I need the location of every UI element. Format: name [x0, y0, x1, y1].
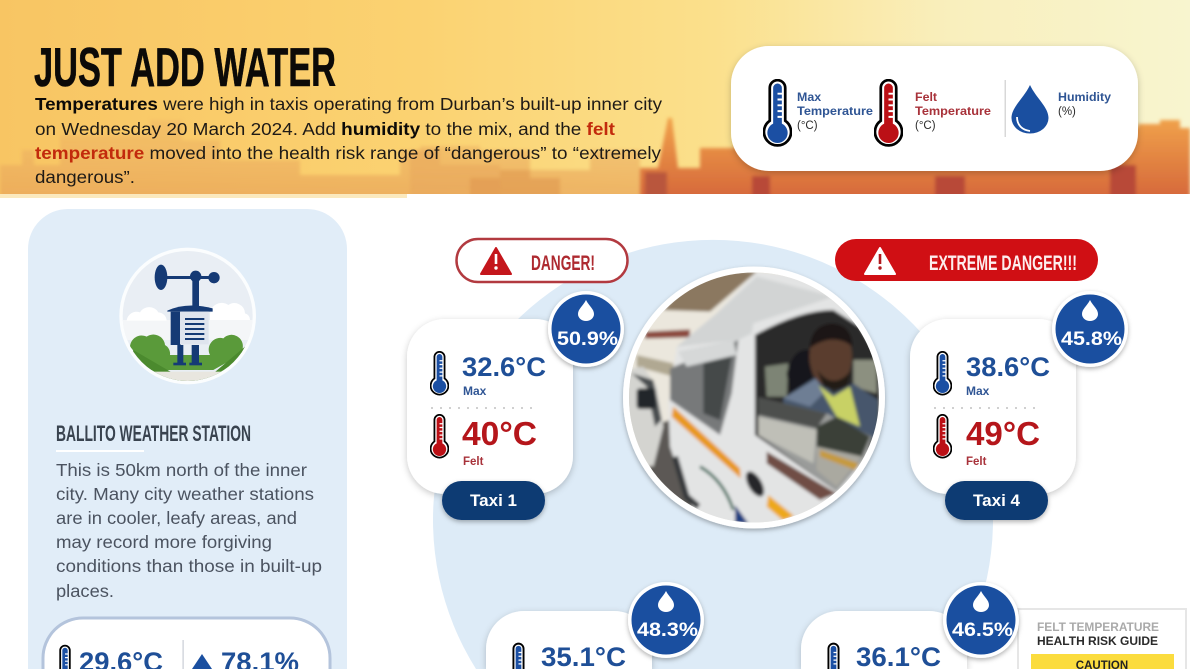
background circle [433, 240, 993, 669]
station description: may record more forgiving [56, 532, 272, 552]
legend panel [731, 46, 1138, 171]
legend: max temperature: Max [797, 90, 821, 104]
legend: felt temperature: Felt [915, 90, 937, 104]
legend: max temperature: Temperature [797, 104, 873, 118]
humidity badge: 48.3% [628, 582, 704, 658]
card: taxi 1: Felt [463, 456, 484, 468]
humidity badge: 50.9%: 50.9% [557, 328, 618, 350]
extreme danger label: EXTREME DANGER!!! [929, 252, 1077, 275]
card: lower left taxi [486, 582, 704, 669]
legend: max temperature [797, 90, 873, 132]
station readings box [43, 618, 330, 669]
danger label: DANGER! [531, 252, 595, 275]
humidity badge: 45.8%: 45.8% [1061, 328, 1122, 350]
header banner with skyline [0, 0, 1190, 200]
card: taxi 1: Max [463, 384, 487, 398]
icon: warning triangle [481, 248, 511, 274]
legend: max temperature: (°C) [797, 120, 818, 132]
intro text: on Wednesday 20 March 2024. Add humidity to the mix, and the felt [35, 119, 615, 139]
danger label [456, 239, 628, 282]
station description: conditions than those in built-up [56, 556, 322, 576]
station description: This is 50km north of the inner [56, 460, 307, 480]
station description: places. [56, 581, 114, 601]
icon: humidity drop [1012, 85, 1048, 134]
intro text: Temperatures were high in taxis operating from Durban’s built-up inner city [35, 94, 662, 114]
legend: humidity: (%) [1058, 106, 1076, 118]
icon: max temperature thermometer [764, 80, 791, 145]
extreme danger label [835, 239, 1098, 281]
card: taxi 1: 40°C [462, 415, 537, 452]
legend: felt temperature: Temperature [915, 104, 991, 118]
card: taxi 4: 38.6°C [966, 352, 1050, 382]
card: taxi 4: Felt [966, 456, 987, 468]
legend: humidity: Humidity [1058, 90, 1111, 104]
card: taxi 1: 32.6°C [462, 352, 546, 382]
legend: felt temperature: (°C) [915, 120, 936, 132]
intro text [35, 94, 662, 187]
card: taxi 4: 49°C [966, 415, 1040, 452]
humidity badge: 48.3%: 48.3% [637, 619, 698, 641]
card: taxi 4 [910, 291, 1128, 520]
intro text: dangerous”. [35, 167, 135, 187]
humidity badge: 46.5% [943, 582, 1019, 658]
humidity badge: 45.8% [1052, 291, 1128, 367]
card: taxi 4: Taxi 4 [973, 491, 1021, 510]
panel: Ballito weather station [28, 209, 347, 669]
photo: taxi driver in minibus [617, 257, 893, 533]
card: taxi 1: Taxi 1 [470, 491, 517, 510]
card: taxi 4: Max [966, 384, 990, 398]
panel: felt temperature health risk guide: HEALTH RISK GUIDE [1037, 634, 1158, 648]
icon: weather station [119, 248, 257, 388]
humidity badge: 46.5%: 46.5% [952, 619, 1013, 641]
intro text: temperature moved into the health risk range of “dangerous” to “extremely [35, 143, 661, 163]
heading: Ballito weather station: BALLITO WEATHER STATION [56, 421, 251, 446]
panel: felt temperature health risk guide: FELT TEMPERATURE [1037, 620, 1159, 634]
title: JUST ADD WATER [34, 36, 336, 98]
legend: humidity [1058, 90, 1111, 118]
legend: felt temperature [915, 90, 991, 132]
icon: felt temperature thermometer [875, 80, 902, 145]
card: lower right taxi [801, 611, 967, 669]
humidity badge: 50.9% [548, 291, 624, 367]
station description: city. Many city weather stations [56, 484, 314, 504]
station description [56, 460, 322, 601]
card: taxi 1 [407, 291, 624, 520]
icon: warning triangle white [865, 248, 895, 274]
station description: are in cooler, leafy areas, and [56, 508, 297, 528]
panel: felt temperature health risk guide [1018, 609, 1186, 669]
